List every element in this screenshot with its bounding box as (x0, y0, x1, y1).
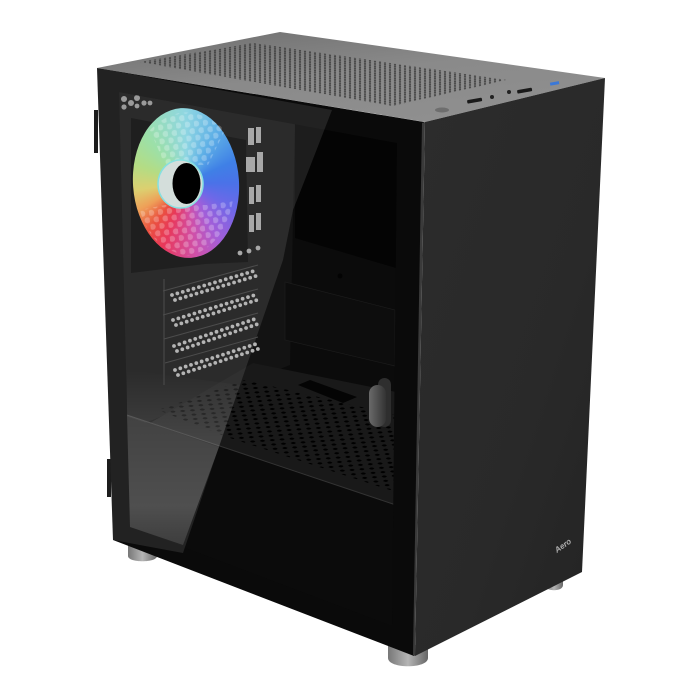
top panel (97, 32, 605, 122)
front IO ports (435, 81, 559, 112)
interior components (121, 95, 263, 385)
illustration: PC case (94, 32, 605, 666)
fan hub (158, 160, 203, 208)
floor (150, 363, 396, 505)
IO slots (238, 127, 263, 255)
hinges (94, 110, 111, 497)
thumb screw handle (369, 378, 391, 427)
case interior (120, 92, 395, 504)
front glass frame (97, 68, 424, 656)
top mesh (140, 43, 507, 106)
logo: Aero (552, 537, 573, 555)
glass reflection (97, 68, 332, 553)
back wall (119, 92, 295, 425)
feet (128, 535, 563, 666)
power supply shroud (122, 415, 396, 626)
expansion slots (172, 271, 258, 375)
fan blade highlights (150, 112, 225, 165)
fan (125, 100, 248, 273)
top vent (121, 95, 152, 110)
side panel (415, 78, 605, 656)
drive bay (295, 124, 397, 268)
